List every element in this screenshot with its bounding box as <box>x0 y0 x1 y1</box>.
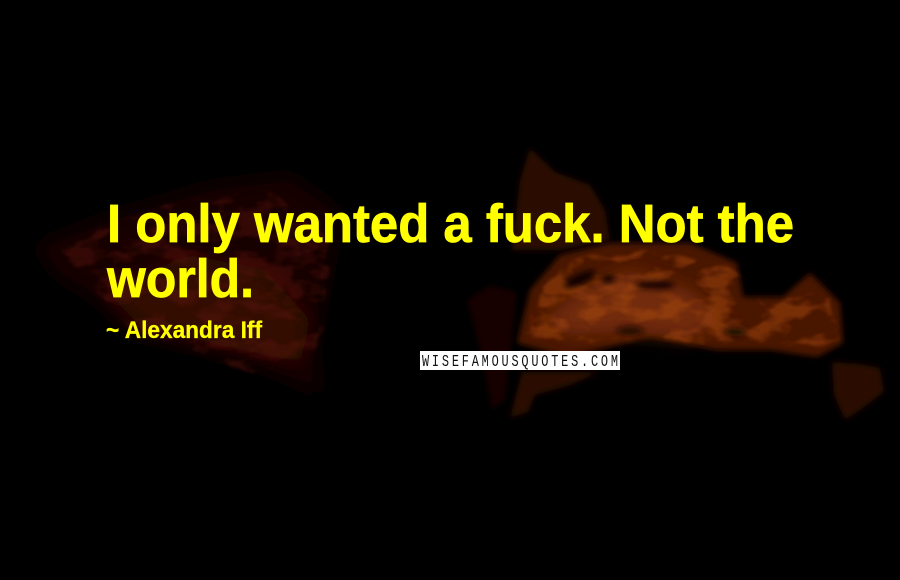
left dim flame <box>35 175 340 395</box>
watermark badge: WISEFAMOUSQUOTES.COM <box>422 353 618 372</box>
author: ~ Alexandra Iff <box>106 317 263 344</box>
far right flame <box>832 362 884 420</box>
quote line 2: world. <box>106 249 254 309</box>
main flame bright core <box>540 270 725 338</box>
quote text <box>106 194 794 344</box>
main flame texture <box>522 248 840 348</box>
main flame dark pockets <box>562 267 747 336</box>
centre dim flame <box>467 285 517 410</box>
lower flame under the watermark <box>510 372 600 418</box>
main right flame body <box>517 243 843 357</box>
background flames <box>35 148 884 420</box>
left flame wisps <box>60 190 330 370</box>
quote line 1: I only wanted a fuck. Not the <box>107 194 794 254</box>
upper flame above the main body <box>512 148 610 250</box>
